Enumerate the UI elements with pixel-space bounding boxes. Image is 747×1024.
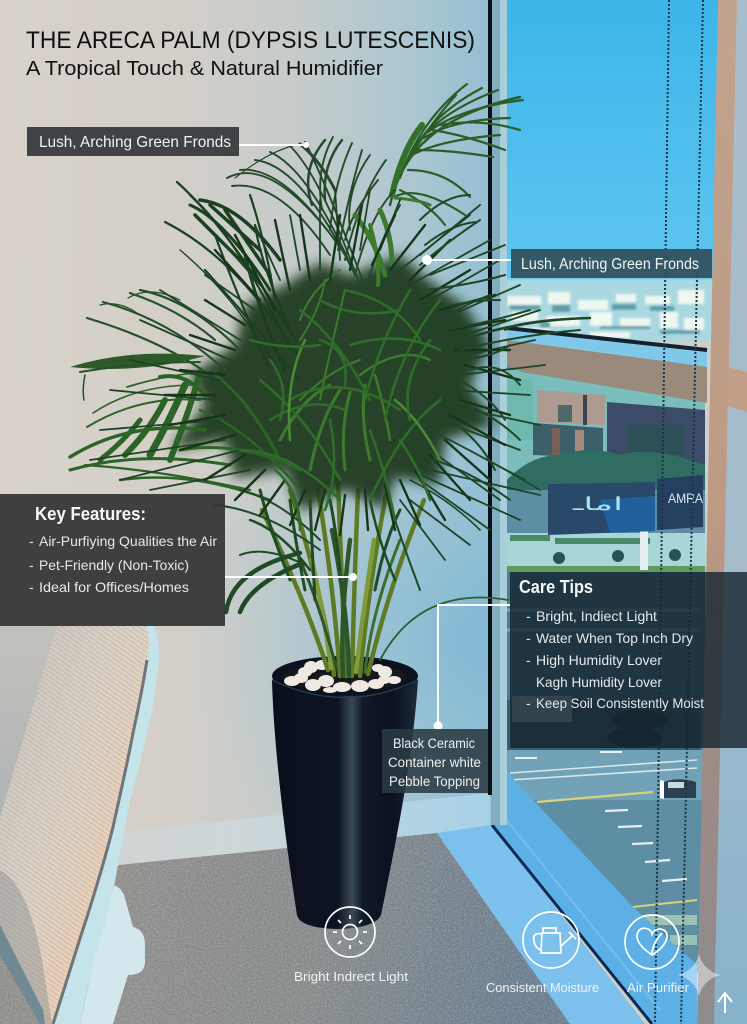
icon: sparkle: [678, 954, 720, 996]
icon: consistent moisture: Consistent Moisture: [486, 980, 599, 995]
frond: left long leaves: [70, 290, 240, 400]
white pebbles: [284, 660, 401, 693]
carpet: [0, 833, 570, 1024]
feature list: -: [29, 533, 34, 549]
icon: air purifier: Air Purifier: [627, 980, 690, 995]
icon: up arrow: [718, 993, 732, 1013]
lower window view: [505, 360, 705, 980]
subtitle: A Tropical Touch & Natural Humidifier: [26, 58, 383, 80]
window sill: [437, 825, 645, 1024]
icon: bright indirect light: [294, 907, 408, 984]
callout: fronds right: [422, 249, 712, 278]
city skyline: [505, 279, 715, 341]
callout: black ceramic container: Black Ceramic: [393, 736, 475, 751]
icon: consistent moisture: [486, 912, 599, 995]
frond: right side: [380, 195, 590, 660]
care list: -: [526, 608, 531, 624]
billboard: [505, 475, 705, 572]
care list: High Humidity Lover: [536, 652, 662, 668]
pot: [272, 656, 418, 929]
buildings: [507, 380, 705, 490]
title: THE ARECA PALM (DYPSIS LUTESCENIS): [26, 27, 475, 54]
chair base: [80, 885, 145, 1024]
feature list: Air-Purfiying Qualities the Air: [39, 533, 217, 549]
callout: fronds left: [27, 127, 309, 156]
chair frame: [53, 600, 159, 1024]
callout: fronds right: Lush, Arching Green Fronds: [521, 256, 699, 273]
callout: black ceramic container: [382, 605, 510, 793]
care list: [526, 608, 704, 711]
stems: [262, 480, 424, 676]
feature list: -: [29, 579, 34, 595]
care list: -: [526, 652, 531, 668]
window frame: [488, 0, 507, 825]
care list: Keep Soil Consistently Moist: [536, 695, 704, 711]
frond: lower left fan: [70, 372, 300, 500]
feature list: Pet-Friendly (Non-Toxic): [39, 557, 189, 573]
care list: Water When Top Inch Dry: [536, 630, 693, 646]
title block: [26, 27, 475, 80]
callout: fronds left: Lush, Arching Green Fronds: [39, 134, 231, 151]
icon: bright indirect light: Bright Indrect Light: [294, 969, 408, 984]
billboard: اماـ: [571, 494, 623, 514]
wall: [0, 0, 494, 846]
panel: key features: [0, 494, 357, 626]
horizontal mullion: [507, 328, 707, 403]
heading: care tips: Care Tips: [519, 577, 593, 597]
feature list: -: [29, 557, 34, 573]
frond: lower left drooping: [215, 490, 420, 612]
frond: centre light leaves: [280, 198, 430, 470]
frond: fine outer leaflets: [90, 190, 545, 560]
care list: Bright, Indiect Light: [536, 608, 657, 624]
heading: key features: Key Features:: [35, 504, 146, 524]
blind cords: [655, 0, 703, 1024]
window base glass band: [492, 770, 697, 1024]
right pillar: [697, 0, 747, 1024]
frond: centre mid leaves: [240, 290, 440, 530]
billboard: AMRA: [668, 490, 704, 506]
callout: black ceramic container: Pebble Topping: [389, 774, 480, 789]
frond: upper left: [165, 182, 300, 390]
frond: top right: [390, 84, 523, 225]
areca palm plant: [70, 84, 590, 676]
upper window sky: [505, 0, 720, 340]
skirting board: [0, 793, 490, 880]
callout: black ceramic container: Container white: [388, 755, 481, 770]
chair mesh: [0, 626, 149, 1024]
feature list: [29, 533, 217, 595]
care list: -: [526, 630, 531, 646]
care list: Kagh Humidity Lover: [536, 674, 662, 690]
icon: air purifier: [625, 915, 690, 995]
frond: arching top left: [227, 137, 400, 300]
office chair: [0, 600, 159, 1024]
soft foliage mass: [170, 255, 495, 512]
chair lower shade: [0, 870, 52, 1024]
panel: care tips: [510, 572, 747, 748]
care list: -: [526, 695, 531, 711]
road and cars: [505, 572, 705, 945]
chair mesh edge: [53, 660, 147, 1024]
feature list: Ideal for Offices/Homes: [39, 579, 189, 595]
